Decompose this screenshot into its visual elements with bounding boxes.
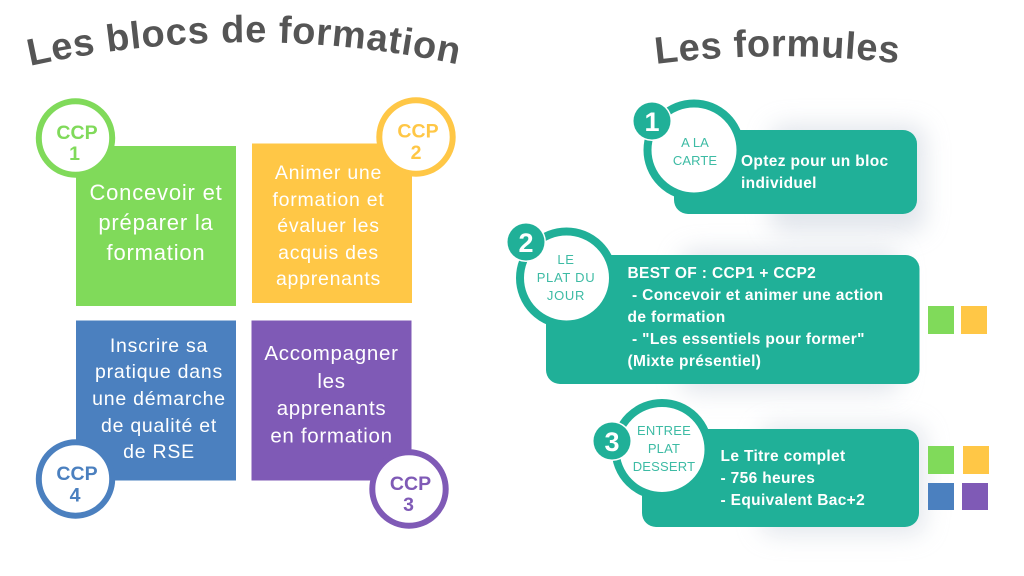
title: Les blocs de formation: Les blocs de formation bbox=[27, 14, 458, 66]
badge label: CCP 4: 4 bbox=[70, 484, 81, 506]
text: CCP 4 description: Inscrire sa bbox=[110, 335, 208, 357]
label: Entree plat dessert: ENTREE bbox=[637, 423, 691, 438]
text: formule 3 description: - 756 heures bbox=[720, 470, 815, 487]
panel: CCP 2 bbox=[252, 100, 453, 303]
block: Concevoir et préparer la formation bbox=[76, 146, 236, 306]
badge label: CCP 2: 2 bbox=[411, 142, 422, 164]
panel: CCP 3 bbox=[252, 320, 446, 526]
badge label: CCP 2: CCP bbox=[397, 120, 439, 142]
label: Entree plat dessert: PLAT bbox=[648, 441, 680, 456]
label: Entree plat dessert: DESSERT bbox=[633, 459, 695, 474]
text: formule 3 description: - Equivalent Bac+2 bbox=[720, 492, 865, 509]
text: CCP 4 description: de qualité et bbox=[101, 415, 217, 437]
text: formule 2 description: de formation bbox=[628, 309, 726, 326]
badge: CCP 3 bbox=[372, 452, 446, 526]
badge: number 1 bbox=[632, 101, 672, 141]
ring: formule 1 bbox=[648, 104, 740, 196]
panel: CCP 4 bbox=[39, 320, 236, 516]
text: CCP 2 description: acquis des bbox=[278, 242, 379, 264]
text: CCP 4 description: de RSE bbox=[123, 441, 195, 463]
badge: number 2 bbox=[506, 222, 546, 262]
text: CCP 2 description: formation et bbox=[273, 189, 384, 211]
panel: formule 2 Le plat du jour bbox=[506, 222, 920, 392]
legend: formule 3 blocs bbox=[928, 446, 989, 510]
text: CCP 4 description: une démarche bbox=[92, 388, 226, 410]
text: CCP 3 description: apprenants bbox=[277, 397, 386, 420]
badge: number 1: 1 bbox=[644, 107, 660, 137]
badge: CCP 1 bbox=[39, 101, 112, 175]
badge label: CCP 1: 1 bbox=[69, 143, 80, 165]
text: formule 3 description: Le Titre complet bbox=[720, 448, 846, 465]
badge: CCP 4 bbox=[39, 442, 112, 516]
text: formule 1 description: Optez pour un bloc bbox=[741, 153, 889, 170]
text: CCP 2 description: apprenants bbox=[276, 268, 381, 290]
panel: formule 3 Entree plat dessert bbox=[592, 403, 925, 535]
block: Animer une formation bbox=[252, 144, 412, 303]
badge label: CCP 3: 3 bbox=[403, 494, 414, 516]
text: CCP 4 description: pratique dans bbox=[95, 361, 223, 383]
text: CCP 3 description: les bbox=[317, 370, 346, 393]
panel: formule 1 A la carte bbox=[632, 101, 925, 232]
text: formule 1 description: individuel bbox=[741, 175, 817, 192]
label: Le plat du jour: LE bbox=[557, 252, 575, 267]
ring: formule 3 bbox=[616, 403, 708, 496]
legend: formule 2 blocs bbox=[928, 306, 987, 334]
badge: CCP 2 bbox=[379, 100, 453, 174]
card: formule 3 bbox=[642, 429, 919, 527]
title: Les formules: Les formules bbox=[656, 29, 898, 64]
label: Le plat du jour: JOUR bbox=[547, 288, 585, 303]
text: formule 2 description: BEST OF : CCP1 + CCP2 bbox=[628, 265, 816, 282]
text: formule 2 description: (Mixte présentiel) bbox=[628, 353, 761, 370]
text: formule 2 description: - "Les essentiels pour former" bbox=[632, 331, 865, 348]
text: CCP 2 description: Animer une bbox=[275, 162, 382, 184]
badge label: CCP 1: CCP bbox=[56, 122, 98, 144]
text: CCP 3 description: en formation bbox=[270, 424, 393, 448]
label: A la carte: CARTE bbox=[673, 153, 717, 168]
text: CCP 1 description: Concevoir et bbox=[89, 180, 223, 205]
shadow: formule 1 bbox=[770, 125, 925, 232]
badge: number 2: 2 bbox=[518, 228, 534, 258]
text: CCP 3 description: Accompagner bbox=[264, 342, 399, 365]
badge: number 3 bbox=[592, 421, 632, 461]
shadow: formule 3 bbox=[760, 425, 925, 535]
ring: formule 2 bbox=[520, 232, 613, 324]
block: Accompagner les apprenants bbox=[252, 320, 412, 480]
badge label: CCP 4: CCP bbox=[56, 463, 98, 485]
text: CCP 1 description: préparer la bbox=[98, 210, 214, 235]
label: Le plat du jour: PLAT DU bbox=[537, 270, 595, 285]
badge label: CCP 3: CCP bbox=[390, 473, 431, 495]
card: formule 2 bbox=[546, 255, 920, 384]
card: formule 1 bbox=[674, 130, 917, 214]
text: CCP 1 description: formation bbox=[107, 240, 205, 265]
panel: CCP 1 bbox=[39, 101, 236, 306]
shadow: formule 2 bbox=[680, 250, 900, 392]
text: formule 2 description: - Concevoir et animer une action bbox=[632, 287, 884, 304]
block: Inscrire sa pratique bbox=[76, 320, 236, 480]
label: A la carte: A LA bbox=[681, 135, 709, 150]
badge: number 3: 3 bbox=[604, 427, 620, 457]
text: CCP 2 description: évaluer les bbox=[277, 215, 380, 237]
